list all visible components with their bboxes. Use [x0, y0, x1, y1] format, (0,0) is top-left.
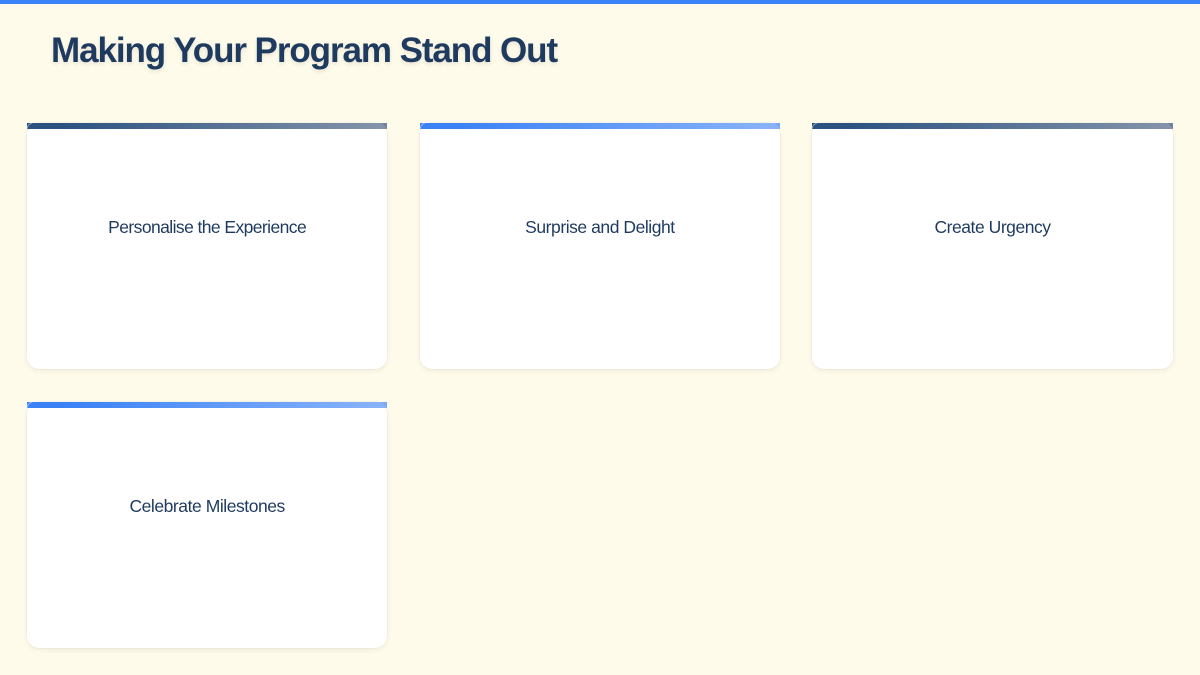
card label: Celebrate Milestones — [129, 496, 285, 516]
panel: Personalise the Experience — [27, 123, 387, 369]
title: Making Your Program Stand Out — [51, 31, 557, 70]
card accent bar: blue — [27, 402, 387, 408]
top accent bar — [0, 0, 1200, 4]
panel: Create Urgency — [812, 123, 1173, 369]
card accent bar: navy — [812, 123, 1173, 129]
card label: Create Urgency — [934, 217, 1051, 237]
panel: Surprise and Delight — [420, 123, 780, 369]
card label: Surprise and Delight — [525, 217, 675, 237]
card label: Personalise the Experience — [108, 217, 306, 237]
card accent bar: navy — [27, 123, 387, 129]
card accent bar: blue — [420, 123, 780, 129]
panel: Celebrate Milestones — [27, 402, 387, 648]
